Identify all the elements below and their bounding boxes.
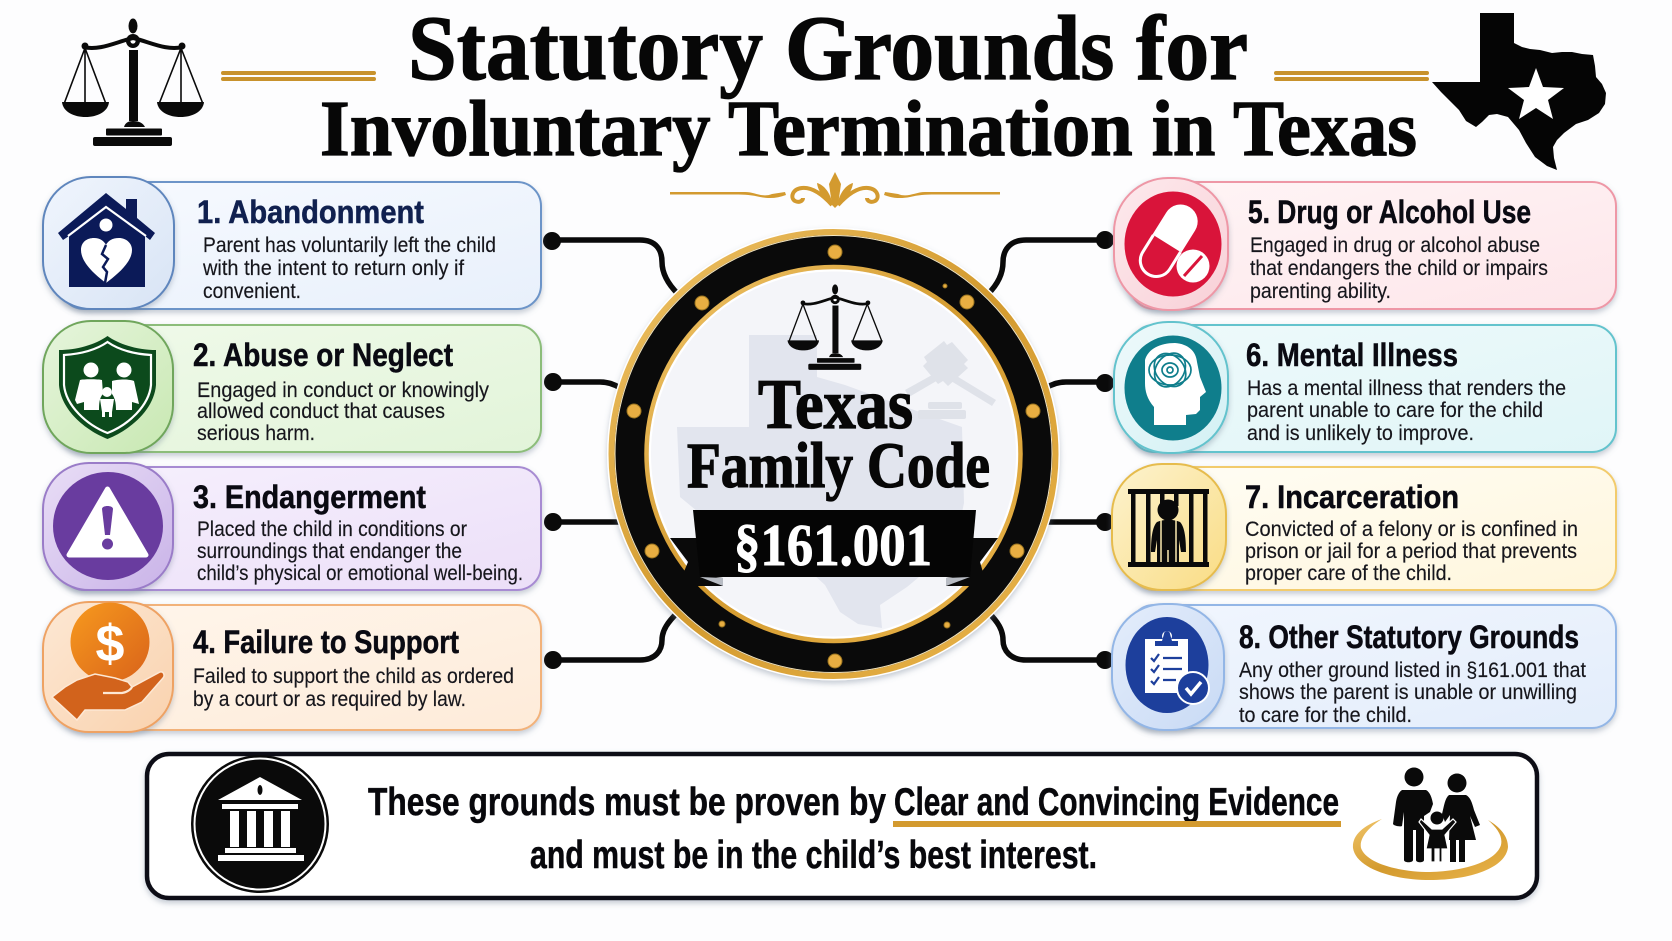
description: prison or jail for a period that prevents xyxy=(1245,540,1577,563)
description xyxy=(1245,518,1578,585)
panel: 5 Drug or Alcohol Use xyxy=(1114,178,1616,310)
panel: 1 Abandonment xyxy=(43,177,541,309)
heading: 2. Abuse or Neglect xyxy=(193,337,453,373)
icon: house with broken heart xyxy=(58,193,155,287)
description: child’s physical or emotional well-being. xyxy=(197,562,523,585)
seal heading xyxy=(687,366,990,502)
description: with the intent to return only if xyxy=(202,257,464,280)
ribbon banner xyxy=(670,510,998,586)
icon: Texas map with star xyxy=(1432,13,1606,170)
title: Involuntary Termination in Texas xyxy=(320,86,1417,173)
seal heading: Texas xyxy=(758,366,913,444)
description xyxy=(193,665,514,711)
description: Placed the child in conditions or xyxy=(197,518,467,541)
description: surroundings that endanger the xyxy=(197,540,462,563)
panel: 6 Mental Illness xyxy=(1114,322,1616,453)
decorative gold rule right xyxy=(1274,71,1429,81)
heading: 5. Drug or Alcohol Use xyxy=(1248,194,1531,230)
description xyxy=(1247,377,1566,445)
description: Engaged in drug or alcohol abuse xyxy=(1250,234,1540,257)
icon: scales of justice (header) xyxy=(62,18,204,146)
ornament: gold flourish divider xyxy=(670,172,1000,208)
heading: 7. Incarceration xyxy=(1245,479,1459,515)
description xyxy=(202,234,496,303)
icon: clipboard checklist xyxy=(1126,617,1209,713)
icon: warning triangle xyxy=(53,472,163,580)
icon: family with gold ring xyxy=(1353,768,1508,880)
evidence statement xyxy=(368,781,1341,877)
description xyxy=(1239,659,1586,727)
decorative gold rule left xyxy=(221,71,376,81)
description: shows the parent is unable or unwilling xyxy=(1239,681,1577,704)
description: Failed to support the child as ordered xyxy=(193,665,514,688)
description: Any other ground listed in §161.001 that xyxy=(1239,659,1586,682)
seal heading: Family Code xyxy=(687,430,990,502)
heading: 6. Mental Illness xyxy=(1246,337,1458,373)
callout: clear and convincing evidence banner xyxy=(147,754,1537,898)
heading: 8. Other Statutory Grounds xyxy=(1239,619,1579,655)
title xyxy=(320,0,1417,173)
icon: hand holding coin: $ xyxy=(96,615,125,673)
icon: pills xyxy=(1124,192,1222,296)
panel: 2 Abuse or Neglect xyxy=(43,321,541,453)
description: and is unlikely to improve. xyxy=(1247,422,1474,445)
description: Has a mental illness that renders the xyxy=(1247,377,1566,400)
heading: 1. Abandonment xyxy=(197,194,424,230)
heading: 4. Failure to Support xyxy=(193,624,459,660)
icon: hand holding coin xyxy=(52,602,164,720)
description: to care for the child. xyxy=(1239,704,1412,727)
panel: 4 Failure to Support xyxy=(43,602,541,732)
heading: 3. Endangerment xyxy=(193,479,426,515)
evidence statement: Clear and Convincing Evidence xyxy=(894,781,1339,824)
description: serious harm. xyxy=(197,422,315,445)
description: Engaged in conduct or knowingly xyxy=(197,379,489,402)
watermark: gavel xyxy=(905,341,996,419)
section number: §161.001 xyxy=(734,512,932,578)
connectors: right side xyxy=(988,231,1114,669)
description xyxy=(1250,234,1548,303)
panel: central seal Texas Family Code xyxy=(607,228,1060,680)
description: convenient. xyxy=(203,280,301,303)
description: parent unable to care for the child xyxy=(1247,399,1543,422)
panel: 8 Other Statutory Grounds xyxy=(1112,604,1616,730)
description: allowed conduct that causes xyxy=(197,400,445,423)
connectors: left side xyxy=(543,232,678,669)
panel: 7 Incarceration xyxy=(1112,464,1616,590)
watermark: Texas map xyxy=(677,335,964,628)
description xyxy=(197,379,489,445)
icon: person behind bars xyxy=(1128,489,1209,567)
description xyxy=(197,518,523,585)
description: proper care of the child. xyxy=(1245,562,1452,585)
description: that endangers the child or impairs xyxy=(1250,257,1548,280)
description: by a court or as required by law. xyxy=(193,688,466,711)
evidence statement: and must be in the child’s best interest. xyxy=(530,834,1097,877)
title: Statutory Grounds for xyxy=(408,0,1248,99)
ring studs xyxy=(627,245,1040,668)
panel: 3 Endangerment xyxy=(43,463,541,590)
icon: scales of justice (seal) xyxy=(788,284,883,370)
icon: shield with family xyxy=(59,336,156,439)
icon: head with tangled mind xyxy=(1124,336,1222,440)
description: Parent has voluntarily left the child xyxy=(203,234,496,257)
description: Convicted of a felony or is confined in xyxy=(1245,518,1578,541)
description: parenting ability. xyxy=(1250,280,1391,303)
icon: courthouse xyxy=(191,755,329,893)
evidence statement: These grounds must be proven by xyxy=(368,781,886,824)
